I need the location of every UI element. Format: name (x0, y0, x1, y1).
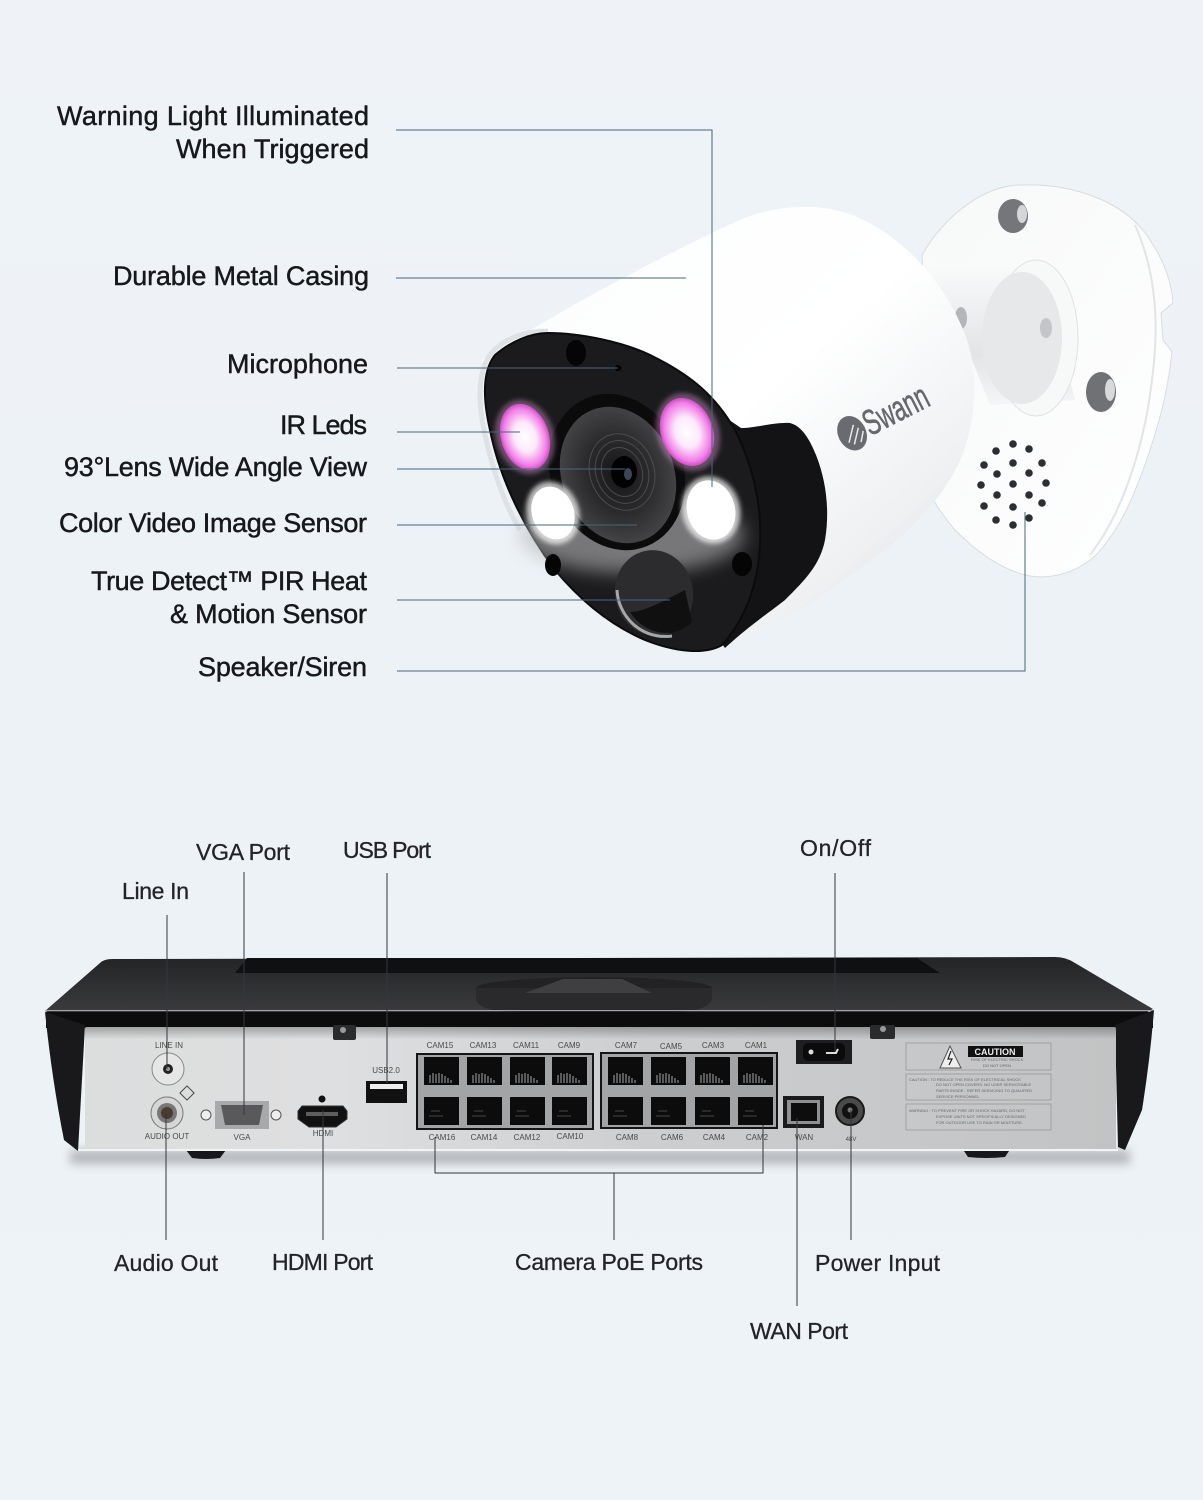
PoE port labels: CAM11 (513, 1041, 540, 1050)
black hood (690, 400, 827, 648)
white LED glow (520, 497, 744, 573)
power input (836, 1097, 864, 1143)
PoE port labels: CAM3 (702, 1041, 725, 1050)
rear panel (85, 1027, 1116, 1150)
HDMI port (298, 1096, 347, 1138)
label: microphone: Microphone (227, 349, 368, 379)
screw holes (545, 340, 752, 576)
power switch (796, 1040, 852, 1064)
PoE port labels: CAM4 (703, 1133, 726, 1142)
USB port (366, 1066, 407, 1103)
label: PoE: Camera PoE Ports (515, 1249, 703, 1275)
ground diamond (180, 1086, 194, 1100)
PoE port labels: CAM2 (746, 1133, 769, 1142)
camera mount plate (922, 185, 1173, 577)
Swann logo: Swann (855, 376, 936, 443)
PoE port labels: CAM8 (616, 1133, 639, 1142)
PoE port labels: CAM7 (615, 1041, 638, 1050)
label: IR LEDs: IR Leds (280, 410, 367, 440)
HDMI port: HDMI (313, 1129, 333, 1138)
caution panel: CAUTION : TO REDUCE THE RISK OF ELECTRICAL SHOCK (909, 1077, 1021, 1082)
caution panel (906, 1043, 1051, 1130)
PoE port labels: CAM15 (427, 1041, 454, 1050)
label: VGA: VGA Port (196, 839, 291, 865)
label: PIR sensor (91, 566, 367, 629)
label: PIR sensor: & Motion Sensor (170, 599, 367, 629)
PoE port labels: CAM12 (514, 1133, 541, 1142)
label: speaker: Speaker/Siren (198, 652, 367, 682)
caution panel: RISK OF ELECTRIC SHOCK (971, 1057, 1024, 1062)
PoE port labels: CAM10 (557, 1132, 584, 1141)
white LEDs (518, 470, 748, 552)
audio out jack (145, 1097, 189, 1141)
WAN port (783, 1096, 824, 1142)
PIR sensor (607, 543, 701, 643)
caution panel: DO NOT OPEN (983, 1063, 1011, 1068)
NVR feet (186, 1148, 1011, 1159)
caution panel: SERVICE PERSONNEL. (936, 1094, 980, 1099)
label: warning light: When Triggered (176, 134, 369, 164)
NVR port labels (114, 835, 941, 1344)
label: USB: USB Port (343, 837, 432, 863)
PoE port labels: CAM1 (745, 1041, 768, 1050)
label: power: Power Input (815, 1250, 941, 1276)
label: warning light: Warning Light Illuminated (57, 101, 369, 131)
IR LEDs (486, 384, 731, 482)
power input: 48V (846, 1137, 856, 1143)
top slot (235, 958, 940, 973)
audio out jack: AUDIO OUT (145, 1132, 189, 1141)
label: HDMI: HDMI Port (272, 1249, 374, 1275)
WAN port: WAN (795, 1133, 813, 1142)
PoE port labels: CAM16 (429, 1133, 456, 1142)
label: image sensor: Color Video Image Sensor (59, 508, 367, 538)
caution panel: WARNING : TO PREVENT FIRE OR SHOCK HAZARD, DO NOT (909, 1108, 1025, 1113)
PoE port labels (427, 1041, 769, 1142)
camera leader lines (396, 130, 1025, 671)
camera front face (485, 333, 760, 651)
caution panel: CAUTION (974, 1047, 1016, 1057)
VGA port: VGA (234, 1133, 251, 1142)
camera neck (925, 260, 1078, 416)
face rim (480, 331, 548, 530)
label: line in: Line In (122, 878, 189, 904)
NVR shadow (70, 1150, 1130, 1164)
lens assembly (526, 373, 708, 571)
PoE port labels: CAM5 (660, 1042, 683, 1051)
label: metal casing: Durable Metal Casing (113, 261, 369, 291)
label: PIR sensor: True Detect™ PIR Heat (91, 566, 367, 596)
camera feature labels (57, 101, 369, 682)
NVR recorder (45, 957, 1154, 1164)
line in jack: LINE IN (155, 1041, 183, 1050)
label: on/off: On/Off (800, 835, 872, 861)
NVR leader lines (166, 872, 851, 1306)
camera body (482, 207, 974, 640)
line in jack (152, 1041, 184, 1085)
PoE port labels: CAM13 (470, 1041, 497, 1050)
right side flap (1115, 1010, 1154, 1150)
label: audio out: Audio Out (114, 1250, 219, 1276)
PoE port labels: CAM9 (558, 1041, 581, 1050)
microphone hole (615, 365, 621, 371)
caution panel: DO NOT OPEN COVERS. NO USER SERVICEABLE (936, 1082, 1032, 1087)
mount tabs (333, 1025, 895, 1040)
front lip (46, 1012, 1153, 1028)
label: warning light (57, 101, 369, 164)
label: lens: 93°Lens Wide Angle View (64, 452, 368, 482)
PoE port labels: CAM14 (471, 1133, 498, 1142)
USB port: USB2.0 (372, 1066, 400, 1075)
top pedestal (476, 977, 712, 1012)
label: WAN: WAN Port (750, 1318, 849, 1344)
caution panel: PARTS INSIDE . REFER SERVICING TO QUALIFIED (936, 1088, 1032, 1093)
caution panel: EXPOSE UNITS NOT SPECIFICALLY DESIGNED (936, 1114, 1026, 1119)
mount screws (998, 199, 1116, 412)
caution panel: FOR OUTDOOR USE TO RAIN OR MOISTURE. (936, 1120, 1023, 1125)
Swann logo (830, 376, 936, 457)
NVR top (45, 957, 1153, 1027)
PoE port block right (601, 1053, 777, 1128)
PoE port labels: CAM6 (661, 1133, 684, 1142)
left side flap (45, 1012, 85, 1151)
camera illustration (480, 185, 1173, 651)
PoE port block left (417, 1054, 593, 1129)
VGA port (201, 1101, 281, 1142)
speaker holes (977, 440, 1050, 529)
